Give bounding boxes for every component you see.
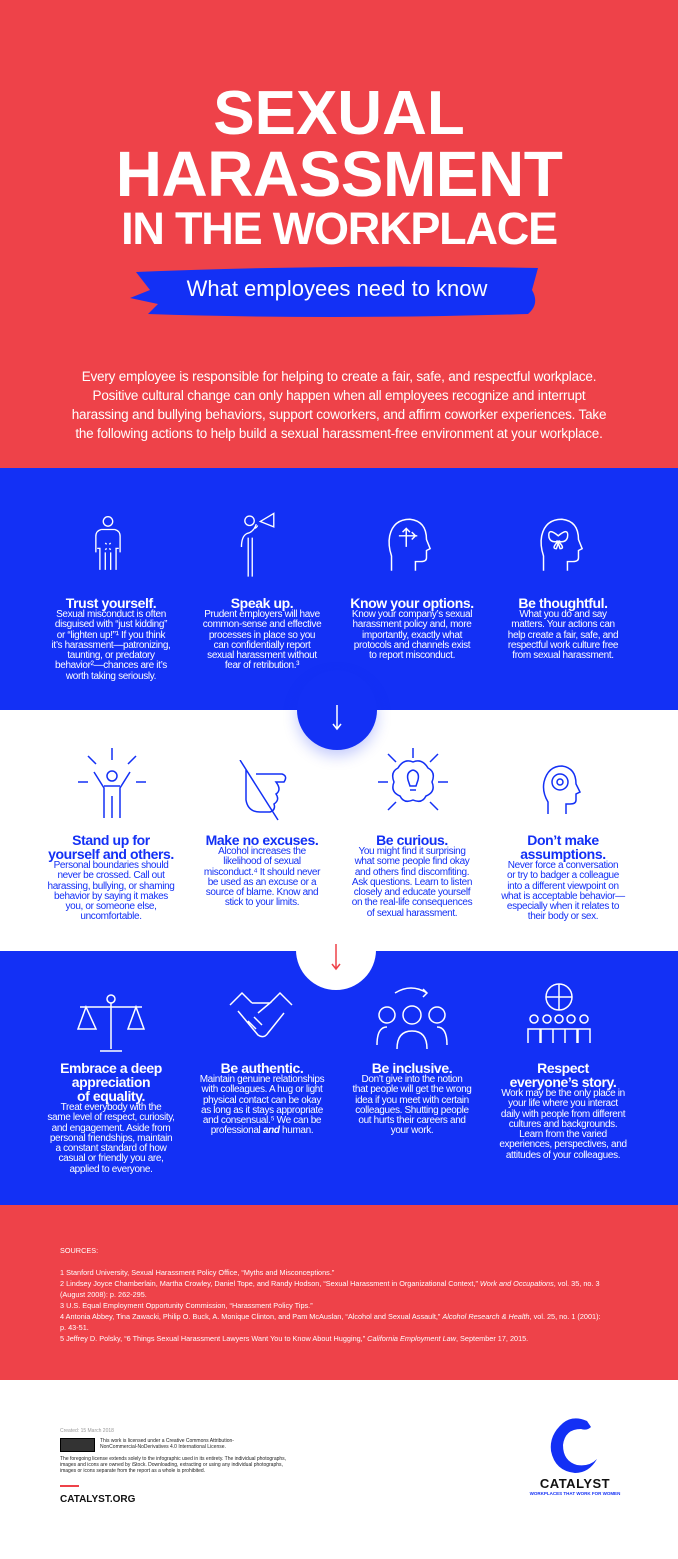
col: speak up: can confidentially report xyxy=(214,640,310,651)
col: deep appreciation: and engagement. Aside from xyxy=(52,1123,170,1134)
col: deep appreciation xyxy=(47,1060,175,1175)
title: HARASSMENT xyxy=(116,138,562,210)
icon: handshake xyxy=(230,992,292,1038)
col: respect story: daily with people from different xyxy=(501,1109,625,1120)
col: inclusive: your work. xyxy=(391,1125,433,1136)
sources text: p. 43-51. xyxy=(60,1323,89,1332)
col: know your options: harassment policy and, more xyxy=(353,619,471,630)
sources text: 1 Stanford University, Sexual Harassment Policy Office, “Myths and Misconceptions.” xyxy=(60,1268,334,1277)
icon: megaphone xyxy=(240,512,274,577)
sources panel xyxy=(0,1205,678,1380)
col: respect story xyxy=(499,1060,627,1161)
col: respect story: Learn from the varied xyxy=(519,1129,607,1140)
col: know your options: Know your company’s sexual xyxy=(352,609,472,620)
col: know your options: protocols and channels exist xyxy=(354,640,470,651)
icon: head butterfly xyxy=(540,518,583,571)
col: be thoughtful xyxy=(508,595,618,661)
icon: head spiral xyxy=(542,765,581,814)
col: be curious: closely and educate yourself xyxy=(354,887,470,898)
panel: blue row 3 xyxy=(0,951,678,1205)
icon: cc license xyxy=(60,1438,234,1452)
col: no excuses xyxy=(204,832,320,908)
icon: cc license: NonCommercial-NoDerivatives 4.0 International License. xyxy=(100,1444,226,1450)
icon: globe people xyxy=(527,983,591,1043)
col: respect story: experiences, perspectives, and xyxy=(499,1139,627,1150)
col: stand up: Personal boundaries should xyxy=(54,860,168,871)
icon: stand up xyxy=(78,748,146,818)
col: authentic: Be authentic. xyxy=(221,1060,303,1076)
col: don't assume: or try to badger a colleague xyxy=(507,870,619,881)
col: authentic: Maintain genuine relationships xyxy=(200,1074,324,1085)
col: trust yourself xyxy=(52,595,170,682)
intro paragraph: Every employee is responsible for helping to create a fair, safe, and respectful workplace. xyxy=(82,369,596,384)
footer license: The foregoing license extends solely to the infographic used in its entirety. The individual photographs, xyxy=(60,1456,286,1462)
col: no excuses: be used as an excuse or a xyxy=(208,877,316,888)
col: don't assume: into a different viewpoint on xyxy=(507,881,619,892)
col: trust yourself: disguised with “just kidding” xyxy=(55,619,167,630)
col: inclusive xyxy=(352,1060,472,1136)
col: know your options: to report misconduct. xyxy=(369,650,455,661)
col: don't assume: Don’t make xyxy=(527,832,599,848)
panel: white row 2 xyxy=(47,748,626,922)
col: be curious: and others find discomfiting. xyxy=(355,867,469,878)
col: deep appreciation: Treat everybody with the xyxy=(61,1102,161,1113)
logo: CATALYST xyxy=(540,1476,610,1491)
footer license: images and icons are owned by iStock. Downloading, extracting or using any individual photographs, xyxy=(60,1462,283,1468)
col: be thoughtful: help create a fair, safe, and xyxy=(508,630,618,641)
col: no excuses: Alcohol increases the xyxy=(218,846,306,857)
col: deep appreciation: appreciation xyxy=(72,1074,150,1090)
col: trust yourself: it’s harassment—patronizing, xyxy=(52,640,170,651)
title: IN THE WORKPLACE xyxy=(121,203,557,254)
col: speak up xyxy=(203,595,322,671)
col: be curious: Ask questions. Learn to listen xyxy=(352,877,472,888)
col: be thoughtful: Be thoughtful. xyxy=(518,595,608,611)
col: deep appreciation: same level of respect, curiosity, xyxy=(47,1112,175,1123)
col: inclusive: idea if you meet with certain xyxy=(355,1095,469,1106)
col: don't assume: their body or sex. xyxy=(528,911,598,922)
col: no excuses: Make no excuses. xyxy=(206,832,318,848)
col: don't assume xyxy=(501,832,626,922)
col: respect story: Work may be the only place in xyxy=(501,1088,625,1099)
col: know your options: Know your options. xyxy=(350,595,474,611)
col: stand up: behavior by saying it makes xyxy=(54,891,168,902)
sources text: 2 Lindsey Joyce Chamberlain, Martha Crowley, Daniel Tope, and Randy Hodson, “Sexual Harassment in Organizational Context,” Work and Occupations, vol. 35, no. 3 xyxy=(60,1279,600,1288)
col: be curious: what some people find okay xyxy=(355,856,469,867)
col: trust yourself: taunting, or predatory xyxy=(67,650,155,661)
col: be curious: on the real-life consequences xyxy=(352,897,472,908)
header panel xyxy=(0,0,678,468)
col: deep appreciation: personal friendships, maintain xyxy=(50,1133,172,1144)
col: be thoughtful: What you do and say xyxy=(519,609,607,620)
icon: brain bulb xyxy=(378,748,448,810)
col: respect story: your life where you interact xyxy=(508,1098,618,1109)
col: speak up: Prudent employers will have xyxy=(204,609,320,620)
col: authentic: with colleagues. A hug or light xyxy=(202,1084,322,1095)
col: be curious: Be curious. xyxy=(376,832,448,848)
icon: inclusive xyxy=(376,987,448,1049)
col: be thoughtful: from sexual harassment. xyxy=(512,650,614,661)
col: authentic: and consensual.⁵ We can be xyxy=(203,1115,321,1126)
col: don't assume: Never force a conversation xyxy=(508,860,618,871)
col: respect story: attitudes of your colleagues. xyxy=(506,1150,620,1161)
col: no excuses: likelihood of sexual xyxy=(223,856,301,867)
subtitle brush xyxy=(130,266,538,317)
col: speak up: fear of retribution.³ xyxy=(225,660,299,671)
logo xyxy=(530,1418,620,1496)
col: deep appreciation: casual or friendly you are, xyxy=(58,1153,164,1164)
col: speak up: common-sense and effective xyxy=(203,619,321,630)
col: respect story: cultures and backgrounds. xyxy=(509,1119,617,1130)
icon: no hand xyxy=(239,760,286,820)
col: trust yourself: or “lighten up!”¹ If you think xyxy=(57,630,165,641)
icon: cc license: This work is licensed under a Creative Commons Attribution- xyxy=(100,1438,234,1444)
col: inclusive: out hurts their careers and xyxy=(358,1115,466,1126)
col: speak up: Speak up. xyxy=(231,595,293,611)
icon: head arrows xyxy=(388,518,431,571)
sources text: (August 2008): p. 262-295. xyxy=(60,1290,147,1299)
sources text: 5 Jeffrey D. Polsky, “6 Things Sexual Harassment Lawyers Want You to Know About Hugging,” California Employment Law, September 17, 2015. xyxy=(60,1334,528,1343)
col: authentic: physical contact can be okay xyxy=(203,1095,321,1106)
footer license xyxy=(60,1428,286,1474)
col: be curious: of sexual harassment. xyxy=(367,908,457,919)
col: trust yourself: Sexual misconduct is often xyxy=(56,609,166,620)
col: be thoughtful: matters. Your actions can xyxy=(511,619,615,630)
col: don't assume: especially when it relates to xyxy=(507,901,619,912)
col: no excuses: stick to your limits. xyxy=(225,897,299,908)
col: speak up: sexual harassment without xyxy=(207,650,317,661)
col: trust yourself: Trust yourself. xyxy=(66,595,156,611)
footer license: images or icons separate from the report as a whole is prohibited. xyxy=(60,1468,205,1474)
col: deep appreciation: Embrace a deep xyxy=(60,1060,162,1076)
sources text xyxy=(60,1246,601,1343)
col: inclusive: colleagues. Shutting people xyxy=(355,1105,469,1116)
logo: WORKPLACES THAT WORK FOR WOMEN xyxy=(530,1491,620,1496)
col: deep appreciation: applied to everyone. xyxy=(69,1164,153,1175)
sources text: 3 U.S. Equal Employment Opportunity Commission, “Harassment Policy Tips.” xyxy=(60,1301,313,1310)
col: don't assume: what is acceptable behavior— xyxy=(501,891,625,902)
sources text: SOURCES: xyxy=(60,1246,98,1255)
arrow circle white xyxy=(296,910,376,990)
col: authentic: as long as it stays appropriate xyxy=(201,1105,323,1116)
col: stand up: uncomfortable. xyxy=(80,911,142,922)
col: stand up: never be crossed. Call out xyxy=(57,870,165,881)
col: know your options: importantly, exactly what xyxy=(362,630,462,641)
panel: blue row 1 xyxy=(0,468,678,710)
col: speak up: processes in place so you xyxy=(209,630,315,641)
footer license: Created: 15 March 2018 xyxy=(60,1428,114,1434)
title xyxy=(116,79,562,254)
col: inclusive: Be inclusive. xyxy=(372,1060,452,1076)
intro paragraph: harassing and bullying behaviors, support coworkers, and affirm coworker experiences. Take xyxy=(72,407,606,422)
icon: person xyxy=(95,516,121,570)
col: deep appreciation: a constant standard of how xyxy=(56,1143,166,1154)
col: respect story: Respect xyxy=(537,1060,589,1076)
col: trust yourself: behavior²—chances are it’s xyxy=(55,660,167,671)
intro paragraph xyxy=(72,369,606,441)
col: don't assume: assumptions. xyxy=(520,846,606,862)
intro paragraph: the following actions to help build a sexual harassment-free environment at your workplace. xyxy=(75,426,603,441)
col: know your options xyxy=(350,595,474,661)
intro paragraph: Positive cultural change can only happen when all employees recognize and interrupt xyxy=(93,388,585,403)
col: be curious: You might find it surprising xyxy=(358,846,466,857)
col: stand up: you, or someone else, xyxy=(65,901,157,912)
col: stand up xyxy=(47,832,174,922)
footer url: CATALYST.ORG xyxy=(60,1494,135,1505)
subtitle brush: What employees need to know xyxy=(187,276,487,301)
col: inclusive: Don’t give into the notion xyxy=(362,1074,462,1085)
icon: scales xyxy=(77,994,145,1052)
col: stand up: yourself and others. xyxy=(48,846,174,862)
col: deep appreciation: of equality. xyxy=(77,1088,145,1104)
col: inclusive: that people will get the wrong xyxy=(352,1084,472,1095)
col: trust yourself: worth taking seriously. xyxy=(66,671,156,682)
arrow circle blue xyxy=(297,670,377,750)
col: be curious xyxy=(352,832,472,919)
col: stand up: harassing, bullying, or shaming xyxy=(47,881,174,892)
col: authentic xyxy=(200,1060,324,1136)
sources text: 4 Antonia Abbey, Tina Zawacki, Philip O. Buck, A. Monique Clinton, and Pam McAuslan, “Alcohol and Sexual Assault,” Alcohol Research & Health, vol. 25, no. 1 (2001): xyxy=(60,1312,601,1321)
col: stand up: Stand up for xyxy=(72,832,150,848)
title: SEXUAL xyxy=(213,79,465,148)
col: no excuses: misconduct.⁴ It should never xyxy=(204,867,320,878)
col: respect story: everyone’s story. xyxy=(510,1074,616,1090)
col: be thoughtful: respectful work culture free xyxy=(508,640,618,651)
col: authentic: professional and human. xyxy=(211,1125,313,1136)
col: no excuses: source of blame. Know and xyxy=(206,887,318,898)
